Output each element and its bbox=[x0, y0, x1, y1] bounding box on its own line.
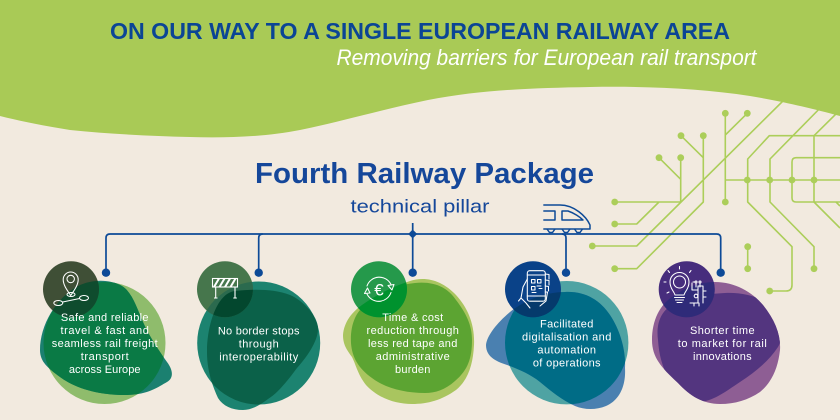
text: time and cost: Time & cost bbox=[382, 312, 443, 324]
icon circle overlap bbox=[664, 282, 715, 318]
text: safe and reliable: transport bbox=[81, 351, 129, 363]
icon: road barrier bbox=[212, 278, 238, 298]
panel: digitalisation bbox=[486, 261, 628, 409]
icon circle bbox=[43, 261, 99, 317]
text: safe and reliable bbox=[52, 312, 158, 376]
text: time and cost bbox=[367, 312, 459, 376]
icon: euro cycle: € bbox=[374, 280, 384, 300]
text: time and cost: less red tape and bbox=[368, 338, 457, 350]
blob front bbox=[658, 293, 783, 402]
blob front bbox=[486, 292, 625, 409]
icon circle bbox=[197, 261, 253, 317]
text: safe and reliable: across Europe bbox=[69, 364, 141, 376]
text: safe and reliable: travel & fast and bbox=[61, 325, 149, 337]
text: no border stops: through bbox=[239, 338, 279, 350]
text: safe and reliable: seamless rail freight bbox=[52, 338, 158, 350]
icon circle overlap bbox=[52, 280, 99, 318]
blob overlap bbox=[44, 282, 166, 404]
green header wave bbox=[0, 0, 840, 137]
icon: map pin route bbox=[54, 272, 88, 306]
blob front bbox=[351, 283, 472, 393]
icon: hand with phone bbox=[518, 271, 549, 308]
text: facilitated digitalisation bbox=[522, 319, 611, 370]
connector tree bbox=[102, 223, 725, 277]
icon circle overlap bbox=[213, 290, 253, 318]
blob back bbox=[343, 279, 474, 404]
text: facilitated digitalisation: Facilitated bbox=[540, 319, 593, 331]
text: no border stops: interoperability bbox=[219, 351, 299, 363]
blob back bbox=[652, 282, 780, 404]
icon circle bbox=[659, 261, 715, 317]
icon: train bbox=[543, 205, 590, 232]
blob back bbox=[197, 282, 320, 404]
text: shorter time: Shorter time bbox=[690, 325, 755, 337]
icon: euro cycle bbox=[364, 277, 394, 301]
subtitle: Removing barriers for European rail transport bbox=[336, 45, 757, 70]
blob front bbox=[207, 290, 318, 410]
text: facilitated digitalisation: of operations bbox=[533, 358, 601, 370]
panel: no border stops bbox=[197, 261, 320, 410]
text: time and cost: administrative bbox=[376, 351, 450, 363]
text: facilitated digitalisation: automation bbox=[537, 345, 596, 357]
text: safe and reliable: Safe and reliable bbox=[61, 312, 149, 324]
text: time and cost: burden bbox=[395, 364, 430, 376]
text: shorter time bbox=[678, 325, 767, 363]
circuit line network bbox=[589, 94, 840, 294]
text: no border stops: No border stops bbox=[218, 325, 300, 337]
icon circle overlap bbox=[358, 282, 407, 318]
text: no border stops bbox=[218, 325, 300, 363]
text: shorter time: innovations bbox=[693, 351, 752, 363]
icon circle overlap base bbox=[206, 282, 253, 314]
text: facilitated digitalisation: digitalisation and bbox=[522, 332, 611, 344]
heading: Fourth Railway Package: Fourth Railway Package bbox=[255, 158, 594, 190]
title: ON OUR WAY TO A SINGLE EUROPEAN RAILWAY AREA bbox=[110, 18, 730, 44]
panel: shorter time to market bbox=[652, 261, 783, 404]
subheading: technical pillar: technical pillar bbox=[350, 196, 490, 216]
panel: time and cost reduction bbox=[343, 261, 474, 404]
icon circle bbox=[351, 261, 407, 317]
text: time and cost: reduction through bbox=[367, 325, 459, 337]
blob back bbox=[505, 281, 628, 404]
blob front bbox=[40, 281, 172, 395]
icon: light bulb with circuit bbox=[664, 266, 706, 306]
icon circle overlap bbox=[514, 292, 561, 318]
text: shorter time: to market for rail bbox=[678, 338, 767, 350]
panel: safe and reliable travel bbox=[40, 261, 172, 404]
icon circle bbox=[505, 261, 561, 317]
blob overlap bbox=[207, 290, 318, 404]
blob overlap bbox=[505, 292, 625, 404]
blob back bbox=[44, 282, 166, 404]
